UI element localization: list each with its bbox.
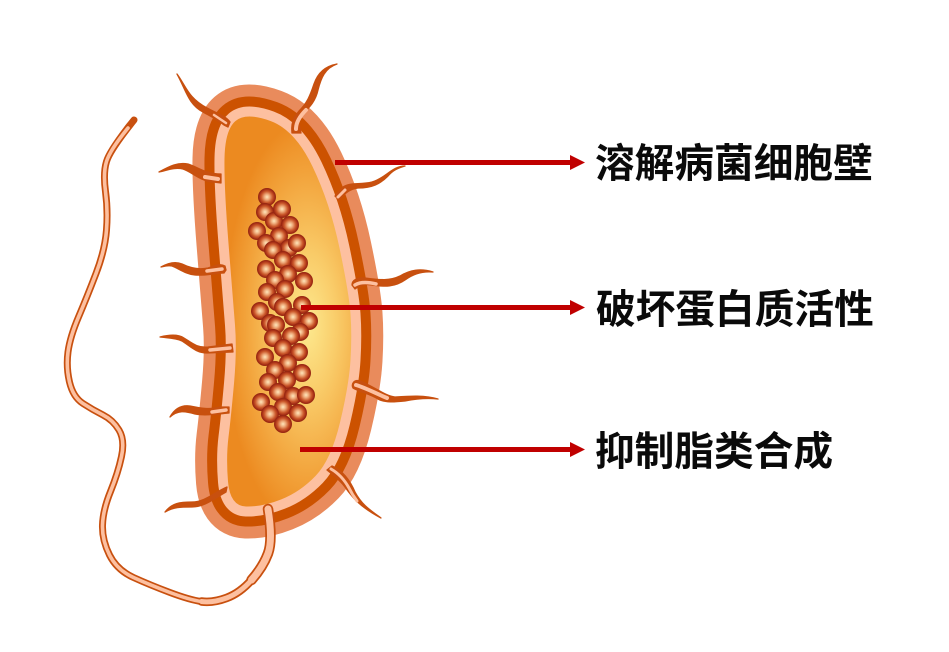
- arrow: protein: [301, 300, 585, 315]
- label: lyse cell wall: 溶解病菌细胞壁: [595, 142, 873, 186]
- granule cluster: [248, 188, 318, 433]
- arrow: cell wall: [335, 155, 585, 170]
- long flagellum: [67, 120, 270, 602]
- label: destroy protein activity: 破坏蛋白质活性: [596, 288, 874, 332]
- short flagella: [159, 64, 438, 518]
- cell envelope layers: [224, 116, 351, 507]
- arrow: lipid: [300, 442, 585, 457]
- flagella highlights: [205, 110, 387, 501]
- cytoplasm: [224, 116, 351, 507]
- bacterium illustration: [67, 64, 438, 602]
- label: inhibit lipid synthesis: 抑制脂类合成: [595, 430, 833, 474]
